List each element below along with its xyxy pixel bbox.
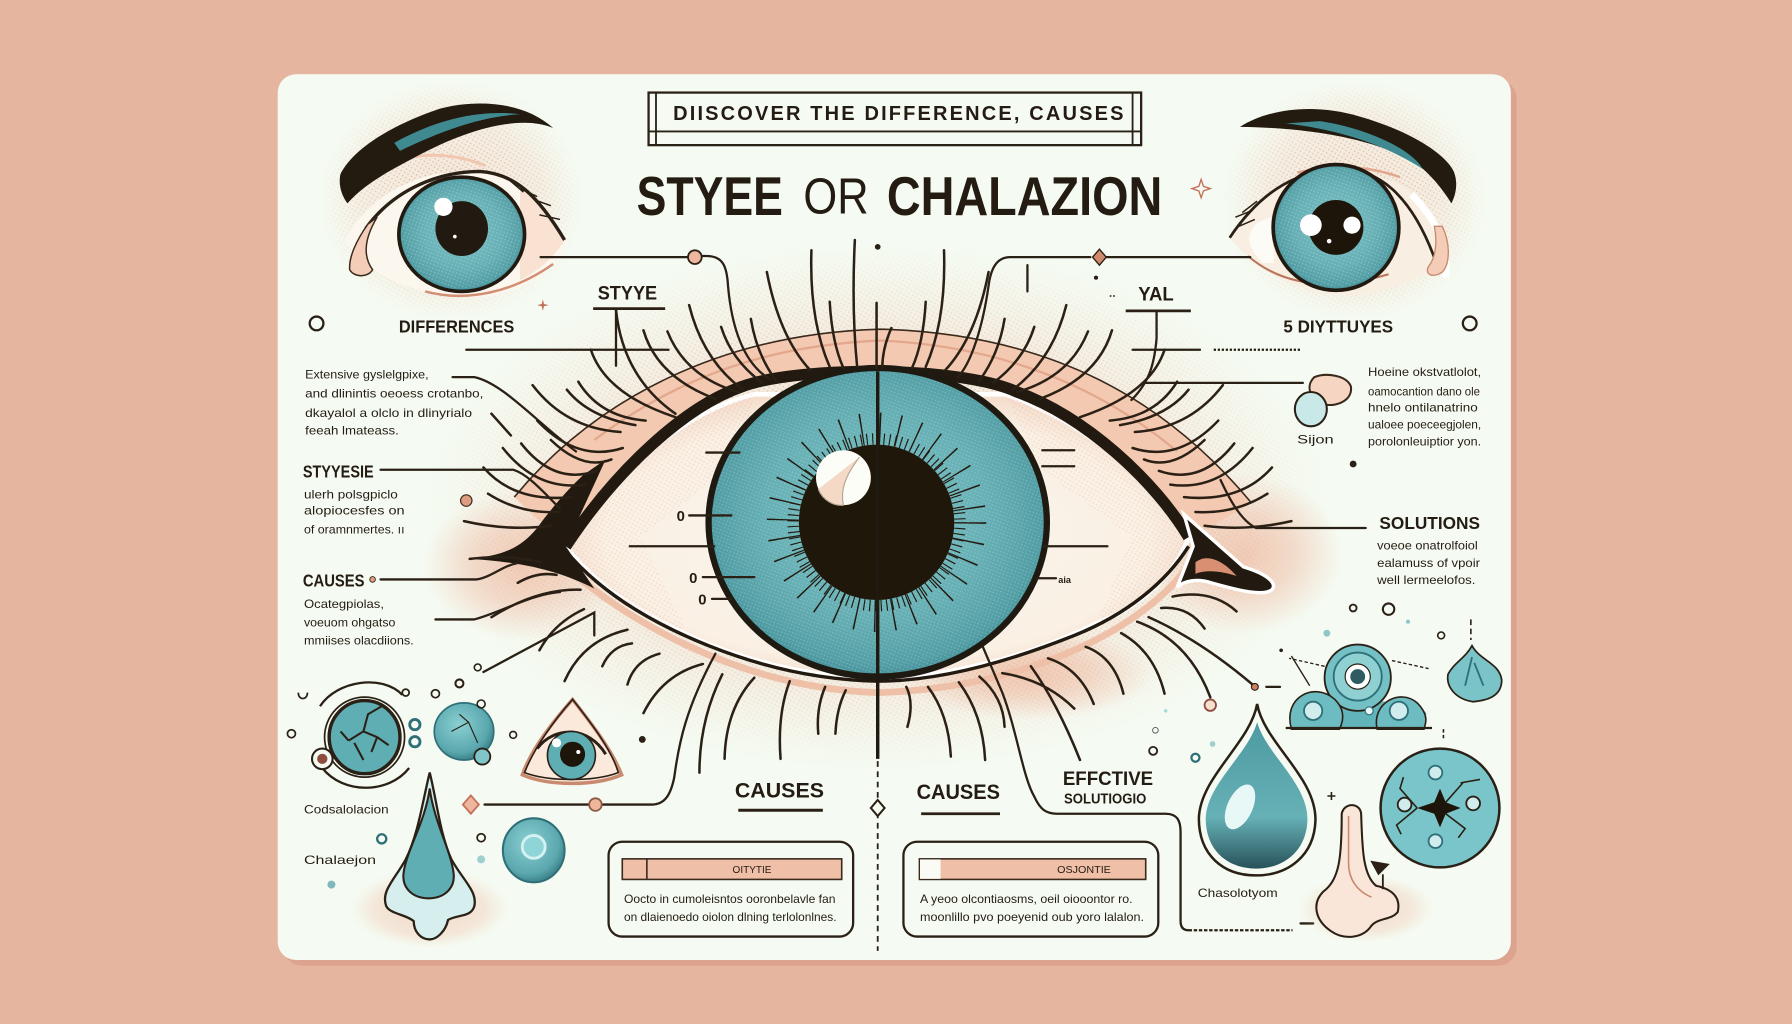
heading: effective solutions: EFFCTIVE: [1063, 768, 1153, 790]
panel: left callout box: Oocto in cumoleisntos ooronbelavle fan: [624, 892, 835, 906]
text block: causes left: CAUSES: [303, 570, 365, 590]
text block: solutions: ealamuss of vpoir: [1377, 556, 1480, 570]
iris fibres: [793, 439, 960, 606]
pupil highlight: [816, 450, 871, 505]
text block: styyesie: ulerh polsgpiclo: [304, 487, 398, 501]
icon: triple circles: [1286, 645, 1443, 741]
panel: right callout box: A yeoo olcontiaosms, oeil oiooontor ro.: [920, 892, 1133, 906]
pupil: [799, 445, 954, 600]
title: STYEE: [637, 165, 783, 227]
caption: chasolotyom: Chasolotyom: [1198, 886, 1278, 900]
title: [637, 165, 1162, 227]
text block: differences: Extensive gyslelgpixe,: [305, 367, 429, 381]
illustration: main eye: [434, 252, 1332, 759]
panel: left callout box: OITYTIE: [733, 865, 772, 876]
icon: cracked iris: [312, 682, 420, 788]
heading: effective solutions: [1063, 768, 1153, 807]
title: OR: [803, 167, 869, 225]
heading: differences: DIFFERENCES: [399, 317, 514, 337]
text block: differences: feeah lmateass.: [305, 423, 399, 437]
text block: right: hnelo ontilanatrino: [1368, 400, 1478, 414]
stipple: [454, 254, 1300, 752]
text block: styyesie: of oramnmertes. ıı: [304, 523, 405, 537]
label: yal: [1126, 284, 1191, 311]
text block: right: oamocantion dano ole: [1368, 384, 1480, 398]
right corner wedge: [1177, 514, 1273, 593]
icon: big teardrop: [1199, 704, 1315, 875]
text block: right: Hoeine okstvatlolot,: [1368, 365, 1481, 379]
text block: right: porolonleuiptior yon.: [1368, 435, 1481, 449]
text block: solutions: well lermeelofos.: [1376, 573, 1475, 587]
icon: peach and teal pair: [1295, 375, 1351, 426]
small scattered dots: [287, 244, 1477, 889]
icon: cracked ball: [434, 700, 494, 765]
text block: causes left: [303, 570, 414, 648]
icon: triangular eye: [522, 699, 622, 783]
heading: causes centre right: [917, 779, 1000, 814]
text block: styyesie: [303, 462, 405, 537]
title: CHALAZION: [887, 165, 1162, 227]
lid lines: [566, 372, 1189, 546]
corner blush: [434, 484, 1332, 714]
icon: sparkle: [1192, 179, 1210, 198]
heading: effective solutions: SOLUTIOGIO: [1064, 791, 1146, 807]
icon: tear nose: [350, 773, 510, 949]
iris tick labels: 0: [677, 509, 685, 525]
caption: codsalolacion: Codsalolacion: [304, 803, 389, 817]
icon: peach stem: [1297, 805, 1434, 943]
icon: sparkle small: [537, 299, 549, 311]
eyelashes: upper right: [912, 250, 1291, 528]
text block: solutions: SOLUTIONS: [1379, 513, 1480, 533]
icon: gem drop: [1448, 619, 1502, 702]
panel: left callout box: on dlaienoedo oiolon dlning terlolonlnes.: [624, 910, 837, 924]
icon: teal ball: [503, 818, 565, 882]
left corner wedge: [470, 459, 606, 589]
eyelashes: lower: [470, 557, 1253, 773]
text block: solutions: [1376, 513, 1480, 587]
label: styye: STYYE: [598, 282, 657, 304]
illustration: top right eye: [1226, 84, 1482, 316]
text block: differences: [305, 367, 483, 437]
panel: right callout box: OSJONTIE: [1057, 865, 1111, 876]
heading: causes centre left: CAUSES: [735, 778, 824, 803]
caption: sijon: Sijon: [1297, 432, 1334, 446]
skin halo: [426, 246, 1329, 771]
panel: card: [278, 74, 1511, 960]
iris tick labels: 0: [698, 593, 707, 609]
text block: causes left: Ocategpiolas,: [304, 597, 384, 611]
text block: differences: and dlinintis oeoess crotanbo,: [305, 387, 483, 401]
iris tick labels: aia: [1058, 575, 1072, 585]
panel: right callout box: [903, 842, 1158, 937]
card shadow: [283, 80, 1517, 966]
text block: styyesie: STYYESIE: [303, 462, 374, 482]
eyelashes: upper left: [464, 240, 891, 528]
leader lines: [381, 256, 1366, 951]
text block: styyesie: alopiocesfes on: [304, 503, 405, 517]
heading: right: 5 DIYTTUYES: [1283, 317, 1393, 337]
nodes: [463, 249, 1258, 814]
sclera: [566, 394, 1189, 679]
text block: causes left: mmiises olacdiions.: [304, 634, 414, 648]
text block: solutions: voeoe onatrolfoiol: [1377, 539, 1478, 553]
heading: causes centre right: CAUSES: [917, 779, 1000, 804]
caption: chalaejon: Chalaejon: [304, 853, 376, 867]
icon: cell disc: [1381, 749, 1499, 867]
label: yal: YAL: [1138, 284, 1174, 306]
panel: left callout box: [609, 842, 853, 937]
text block: right: [1368, 365, 1481, 449]
iris tick labels: [677, 509, 1072, 609]
marker: centre diamond: [871, 800, 885, 816]
text block: right: ualoee poeceegjolen,: [1368, 418, 1481, 432]
illustration: top left eye: [324, 84, 579, 315]
upper lid band: [514, 329, 1251, 546]
text block: differences: dkayalol a olclo in dlinyrialo: [305, 406, 472, 420]
title banner: DIISCOVER THE DIFFERENCE, CAUSES: [673, 103, 1123, 125]
title banner: [649, 93, 1141, 145]
iris tick labels: 0: [689, 571, 697, 587]
text block: causes left: voeuom ohgatso: [304, 615, 396, 629]
centre split line: [876, 371, 879, 759]
iris: [709, 368, 1047, 677]
panel: right callout box: moonlillo pvo poeyenid oub yoro lalalon.: [920, 910, 1144, 924]
lower skin band: [571, 566, 1189, 693]
